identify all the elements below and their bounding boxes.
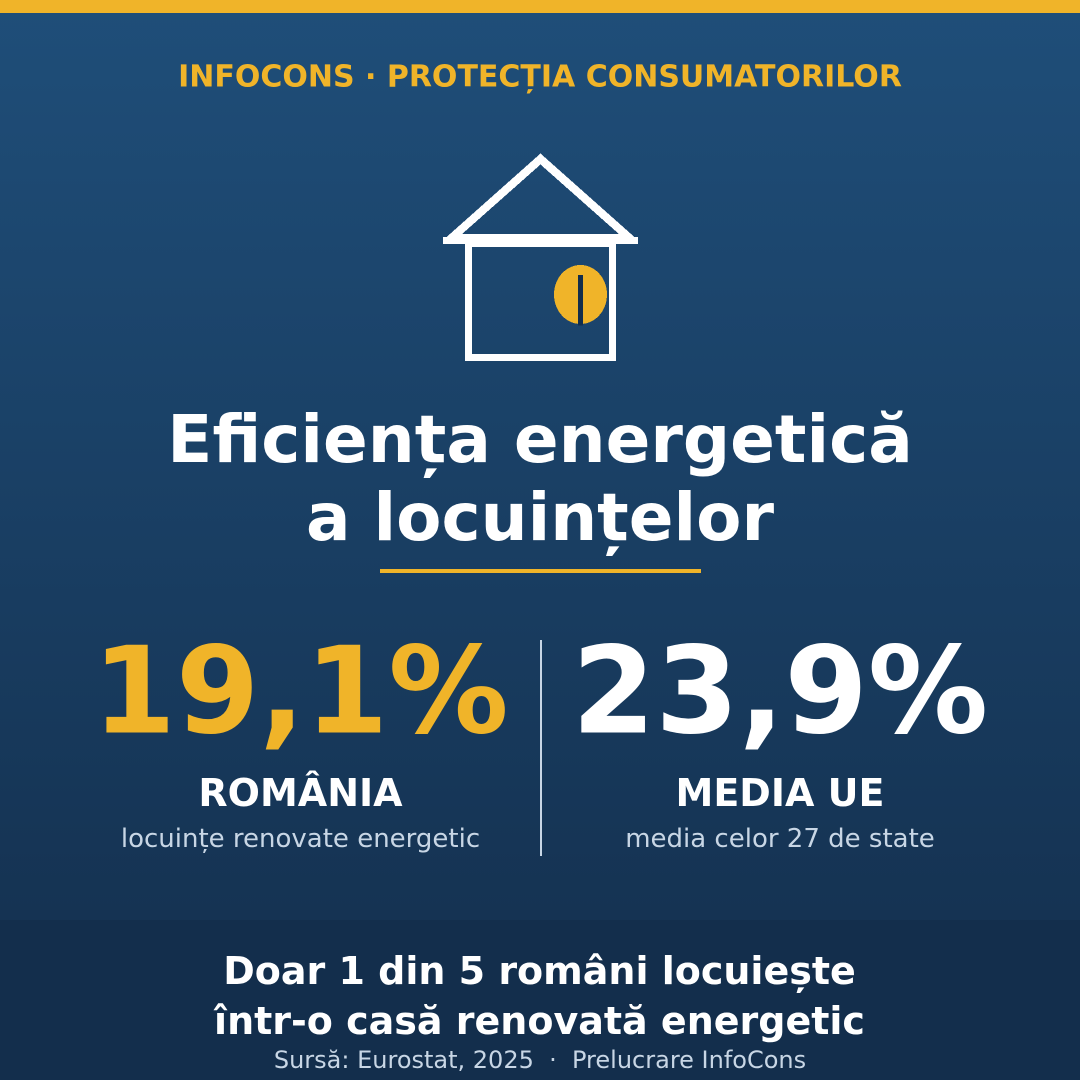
stat: Romania: ROMÂNIA: [198, 771, 403, 815]
stat: Romania: 19,1%: [92, 622, 509, 762]
title: Eficiența energetică: [167, 401, 913, 478]
stat: EU average: 23,9%: [572, 622, 988, 762]
source line: Sursă: Eurostat, 2025 · Prelucrare InfoCons: [274, 1046, 806, 1074]
title underline: [380, 569, 701, 573]
footer message: într-o casă renovată energetic: [213, 999, 865, 1043]
footer panel: [0, 920, 1080, 1080]
top accent bar: [0, 0, 1080, 13]
stat: Romania: locuințe renovate energetic: [121, 824, 480, 854]
title: a locuințelor: [306, 479, 774, 556]
stat: EU average: MEDIA UE: [676, 771, 884, 815]
stat: Romania: [92, 622, 509, 854]
stat: EU average: media celor 27 de state: [625, 824, 935, 854]
stat: EU average: [572, 622, 988, 854]
icon: house with light bulb: [443, 154, 638, 358]
title: [167, 401, 913, 556]
header label: INFOCONS · PROTECȚIA CONSUMATORILOR: [178, 60, 902, 94]
footer message: [213, 949, 865, 1043]
footer message: Doar 1 din 5 români locuiește: [223, 949, 856, 993]
divider: [540, 640, 542, 856]
